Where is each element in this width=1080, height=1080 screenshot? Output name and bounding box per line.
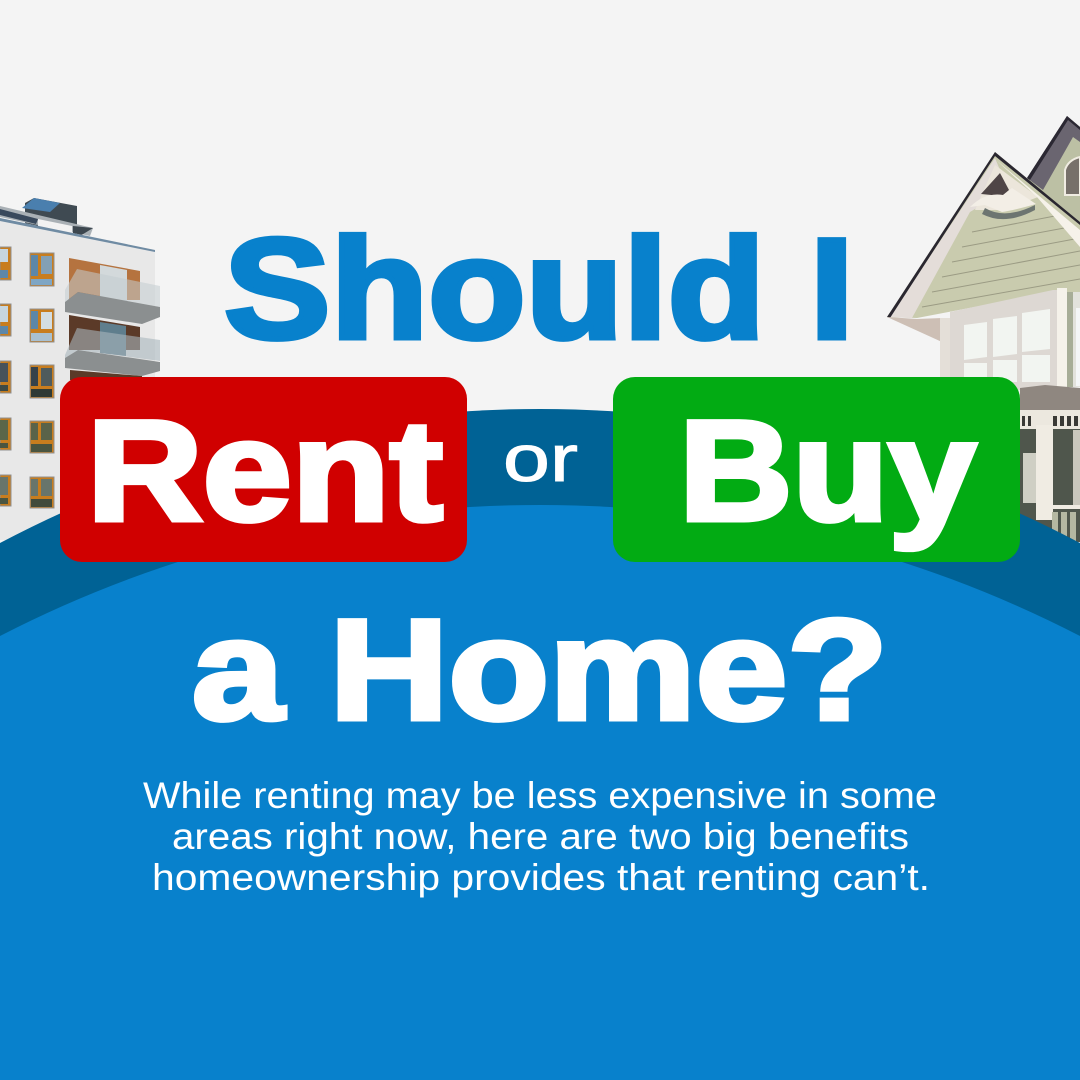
connector word: or: or [503,421,578,495]
badge: Buy [613,377,1020,562]
intro paragraph: areas right now, here are two big benefits [172,816,909,857]
intro paragraph: homeownership provides that renting can’t. [152,857,930,898]
light blue arc [0,505,1080,1080]
photo: apartment building [0,198,160,540]
title: a Home?: a Home? [192,591,888,750]
badge: Rent: Rent [87,392,443,551]
intro paragraph [143,775,937,898]
photo: victorian house [887,116,1080,542]
badge: Rent [60,377,467,562]
dark blue arc [0,409,1080,1080]
badge: Buy: Buy [679,392,976,551]
title: Should I: Should I [224,210,854,369]
intro paragraph: While renting may be less expensive in some [143,775,937,816]
